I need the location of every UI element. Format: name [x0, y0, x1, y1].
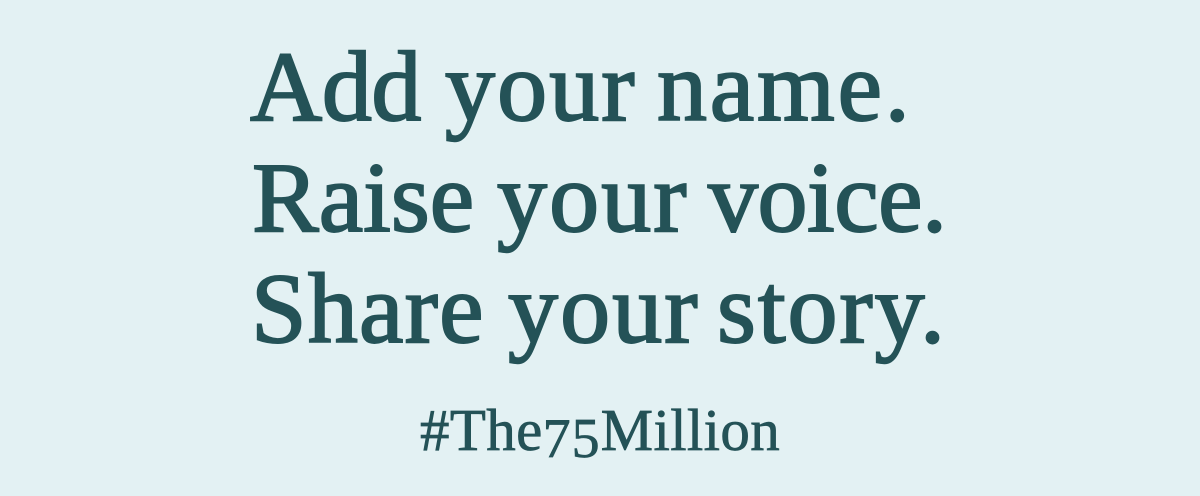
- hashtag: #The75Million: [420, 397, 780, 470]
- headline line 2: [252, 142, 947, 254]
- headline line 3: [251, 253, 947, 364]
- headline line 1: [250, 31, 913, 142]
- headline: [250, 31, 947, 364]
- headline line 2: voice.: [708, 142, 947, 253]
- headline line 3: your: [508, 253, 700, 364]
- headline line 2: your: [497, 142, 689, 253]
- headline line 2: Raise: [252, 142, 474, 253]
- headline line 3: Share: [251, 253, 485, 364]
- headline line 1: Add: [250, 31, 421, 142]
- headline line 3: story.: [717, 253, 947, 364]
- headline line 1: your: [445, 31, 637, 142]
- headline line 1: name.: [657, 31, 913, 142]
